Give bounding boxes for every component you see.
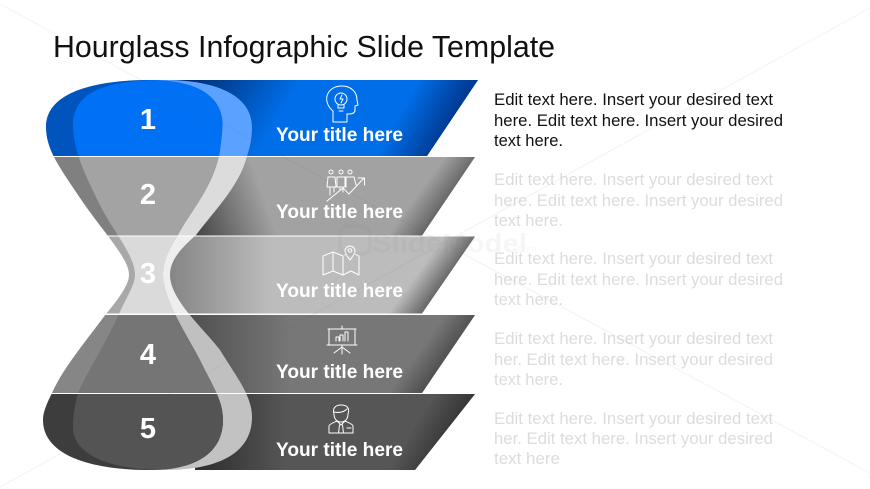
panel: band 2 (54, 157, 782, 236)
description 1 (494, 91, 783, 150)
description 1: here. Edit text here. Insert your desired (494, 112, 783, 130)
banner 5 (195, 394, 475, 470)
description 2: text here. (494, 212, 563, 230)
hourglass segment 1 (46, 80, 252, 156)
title 1: Your title here (276, 124, 403, 146)
description 5 (494, 410, 773, 468)
title: Hourglass Infographic Slide Template (53, 30, 555, 64)
banner 1 (150, 80, 478, 156)
icon: team with rising arrow (327, 170, 364, 201)
description 5: text here (494, 450, 560, 468)
title 3: Your title here (276, 280, 403, 302)
banner 4 (150, 315, 475, 393)
panel: band 5 (43, 394, 773, 470)
icon: presentation board with chart (327, 326, 357, 354)
watermark: SlideModel (372, 228, 527, 258)
number 2: 2 (140, 179, 156, 211)
description 4: text here. (494, 371, 563, 389)
description 1: Edit text here. Insert your desired text (494, 91, 773, 109)
description 2: Edit text here. Insert your desired text (494, 171, 773, 189)
description 1: text here. (494, 132, 563, 150)
icon: head with light bulb (327, 86, 358, 122)
number 1: 1 (140, 104, 156, 136)
panel: band 1 (46, 80, 782, 156)
hourglass segment 4 (52, 315, 246, 393)
description 3: text here. (494, 291, 563, 309)
description 2: here. Edit text here. Insert your desired (494, 192, 783, 210)
watermark: .com (515, 244, 537, 255)
description 3: here. Edit text here. Insert your desired (494, 271, 783, 289)
description 5: her. Edit text here. Insert your desired (494, 430, 773, 448)
hourglass segment 3 (106, 236, 194, 314)
panel: band 4 (52, 315, 773, 393)
icon: folded map with pin (323, 246, 359, 275)
description 4 (494, 330, 773, 389)
hourglass segment 5 (43, 394, 252, 470)
banner 2 (150, 157, 475, 236)
panel: band 3 (106, 236, 782, 314)
description 5: Edit text here. Insert your desired text (494, 410, 773, 428)
hourglass segment 2 (54, 157, 247, 236)
number 4: 4 (140, 339, 156, 371)
banner 3 (150, 236, 475, 314)
description 2 (494, 171, 783, 230)
description 3: Edit text here. Insert your desired text (494, 250, 773, 268)
title 4: Your title here (276, 361, 403, 383)
description 4: her. Edit text here. Insert your desired (494, 351, 773, 369)
description 3 (494, 250, 783, 309)
title 5: Your title here (276, 439, 403, 461)
number 5: 5 (140, 413, 156, 445)
number 3: 3 (140, 258, 156, 290)
description 4: Edit text here. Insert your desired text (494, 330, 773, 348)
title 2: Your title here (276, 201, 403, 223)
icon: businessman (329, 405, 353, 433)
